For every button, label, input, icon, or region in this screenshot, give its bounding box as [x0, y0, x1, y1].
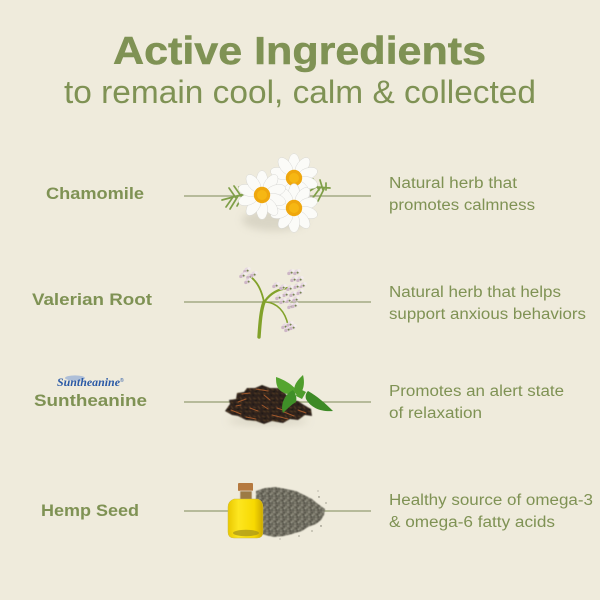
label: Suntheanine: Suntheanine [34, 391, 147, 410]
label: Valerian Root: Valerian Root [32, 290, 152, 309]
label: Chamomile: Chamomile [46, 184, 144, 203]
icon: chamomile flowers [222, 154, 330, 232]
logo: Suntheanine brand: ® [120, 377, 124, 384]
row: Chamomile [46, 154, 535, 232]
description: Hemp Seed: Healthy source of omega-3 [389, 492, 593, 509]
icon: tea heap with leaves [225, 375, 333, 425]
logo: Suntheanine brand: Suntheanine [57, 377, 120, 389]
title: Active Ingredients [113, 30, 486, 73]
row: Chamomile: promotes calmness [389, 197, 535, 214]
icon: valerian sprig [239, 267, 307, 337]
description: Suntheanine: Promotes an alert state [389, 383, 564, 400]
label: Hemp Seed: Hemp Seed [41, 501, 139, 520]
row: Valerian Root: support anxious behaviors [389, 306, 586, 323]
row: Suntheanine [34, 375, 564, 425]
icon: seed pile and oil bottle [228, 483, 327, 540]
subtitle: to remain cool, calm & collected [64, 74, 536, 110]
row: Valerian Root [32, 267, 586, 337]
description: Valerian Root: Natural herb that helps [389, 284, 561, 301]
row: Suntheanine: of relaxation [389, 405, 482, 422]
row: Hemp Seed [41, 483, 593, 540]
row: Hemp Seed: & omega-6 fatty acids [389, 514, 555, 531]
description: Chamomile: Natural herb that [389, 175, 518, 192]
